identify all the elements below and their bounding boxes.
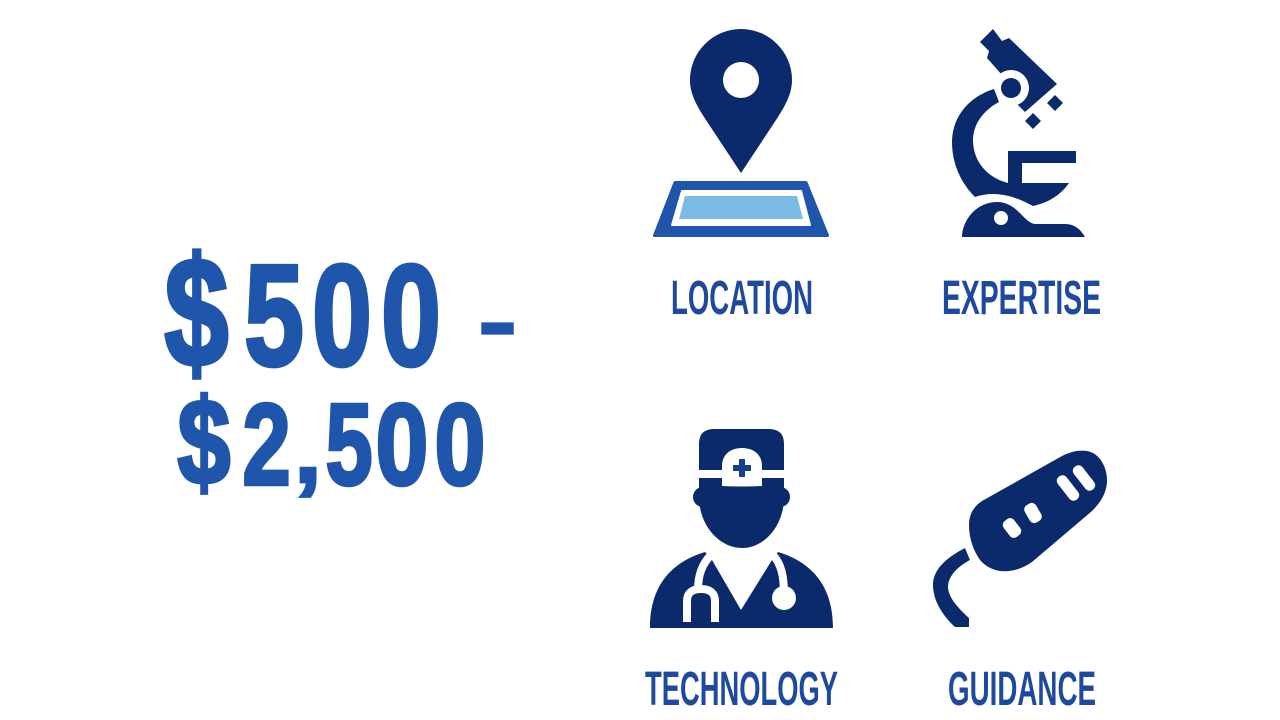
icon: location pin on map — [654, 29, 828, 236]
price line 2: 2 — [242, 379, 291, 509]
price line 2 — [178, 375, 485, 511]
label: guidance: GUIDANCE — [948, 663, 1096, 716]
price line 2: , — [294, 399, 322, 502]
price line 1: 0 — [312, 235, 372, 396]
icon: microscope — [952, 29, 1085, 237]
price line 1: 5 — [244, 235, 304, 396]
price line 2: 5 — [325, 379, 373, 510]
price line 1: 0 — [381, 235, 441, 396]
price line 2: $ — [178, 375, 230, 511]
label: technology: TECHNOLOGY — [645, 663, 838, 716]
price line 1 — [164, 226, 517, 400]
price range — [164, 226, 517, 511]
label: expertise: EXPERTISE — [942, 272, 1101, 325]
price line 2: 0 — [435, 380, 485, 510]
price line 2: 0 — [376, 381, 428, 510]
label: location: LOCATION — [671, 272, 813, 325]
price line 1: $ — [164, 226, 229, 400]
price line 1: - — [478, 275, 517, 368]
icon: doctor with stethoscope — [650, 429, 833, 628]
icon: ultrasound probe — [933, 451, 1107, 627]
